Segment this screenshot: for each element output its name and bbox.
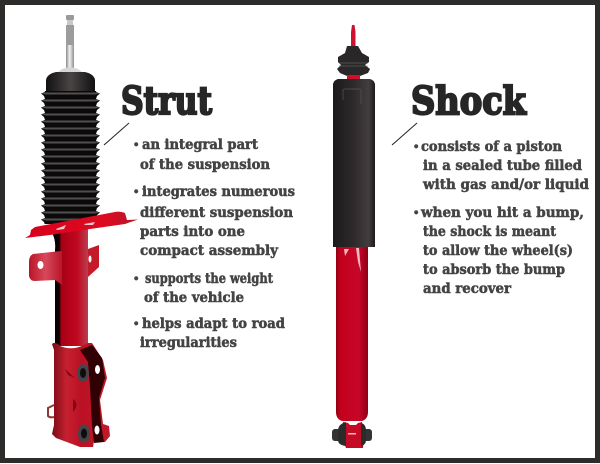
text block: Shock points: to allow the wheel(s): [423, 243, 573, 259]
lower bolt: [78, 424, 90, 442]
lower body: [52, 343, 110, 447]
flange highlights: [56, 222, 95, 230]
right bracket hole: [88, 256, 92, 262]
text block: Shock points: with gas and/or liquid: [422, 177, 589, 193]
text block: Strut points: integrates numerous: [142, 184, 295, 200]
bellows: [41, 91, 100, 224]
red collar: [347, 75, 360, 79]
text block: Strut points: parts into one: [140, 224, 245, 240]
dark rear plate: [80, 345, 105, 443]
text block: Strut points: of the vehicle: [144, 290, 244, 306]
mounting holes: [94, 365, 100, 434]
illustration: strut: [25, 15, 138, 447]
text block: Shock points: in a sealed tube filled: [423, 158, 582, 174]
red rod: [351, 25, 356, 46]
black tube: [333, 79, 375, 247]
upper tube: [52, 226, 88, 346]
lower bushing: [332, 422, 372, 448]
text block: Strut points: supports the weight: [145, 271, 273, 287]
text block: Strut points: [133, 137, 295, 351]
text block: Shock points: [413, 139, 589, 297]
upper bolt: [77, 364, 89, 382]
text block: Strut points: •: [133, 319, 139, 330]
side hook: [48, 405, 54, 417]
piston rod: [58, 15, 82, 72]
heading: Strut: Strut: [121, 78, 212, 123]
text block: Strut points: irregularities: [140, 335, 237, 351]
text block: Strut points: compact assembly: [140, 243, 279, 259]
text block: Shock points: and recover: [423, 281, 512, 297]
red tube: [336, 247, 368, 421]
text block: Shock points: to absorb the bump: [423, 262, 565, 278]
text block: Strut points: •: [133, 187, 139, 198]
text block: Shock points: the shock is meant: [423, 224, 556, 240]
leader line: Shock: [392, 123, 417, 145]
text block: Shock points: when you hit a bump,: [420, 205, 584, 221]
text block: Strut points: •: [133, 274, 139, 285]
rubber boot: [337, 46, 370, 76]
text block: Strut points: an integral part: [142, 137, 258, 153]
heading: Shock: Shock: [411, 78, 527, 123]
dust cap: [46, 72, 95, 91]
left bracket: [29, 251, 62, 285]
body notches: [65, 369, 76, 412]
left bracket hole: [38, 261, 44, 269]
text block: Strut points: •: [133, 140, 139, 151]
leader line: Strut: [104, 123, 129, 145]
tube detail: [343, 89, 361, 104]
text block: Strut points: different suspension: [140, 205, 293, 221]
text block: Shock points: •: [413, 142, 419, 153]
tube highlights: [344, 248, 361, 272]
illustration: shock: [332, 25, 375, 448]
text block: Strut points: helps adapt to road: [142, 316, 285, 332]
right bracket: [88, 245, 99, 277]
text block: Shock points: •: [413, 208, 419, 219]
text block: Strut points: of the suspension: [140, 157, 270, 173]
flange: [25, 212, 138, 238]
text block: Shock points: consists of a piston: [421, 139, 562, 155]
